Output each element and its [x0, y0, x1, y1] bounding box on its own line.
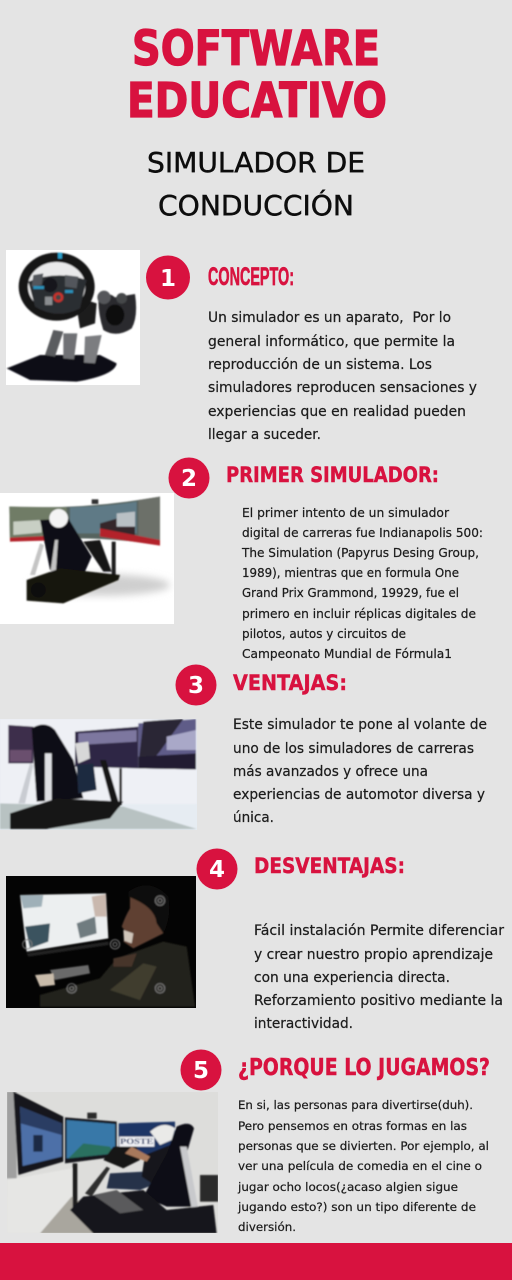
text: por que lo jugamos: Pero pensemos en otras formas en las — [238, 1119, 467, 1133]
title: SOFTWARE — [132, 21, 380, 77]
text: ventajas: Este simulador te pone al volante de — [233, 717, 487, 733]
photo: driver in a triple-screen simulator — [7, 1092, 218, 1233]
photo: steering wheel, shifter and pedals — [6, 250, 140, 385]
subtitle: SIMULADOR DE — [147, 146, 365, 179]
text: primer simulador: pilotos, autos y circuitos de — [242, 627, 406, 641]
text: por que lo jugamos: ver una película de comedia en el cine o — [238, 1159, 482, 1173]
number badge 1: 1 — [160, 266, 176, 292]
number badge 3: 3 — [188, 673, 204, 699]
number badge 2: 2 — [181, 466, 197, 492]
text: ventajas: experiencias de automotor diversa y — [233, 787, 485, 803]
panel: desventajas — [6, 848, 504, 1032]
text: concepto: general informático, que permite la — [208, 334, 455, 350]
number badge 2 — [168, 458, 210, 498]
text: concepto: llegar a suceder. — [208, 427, 321, 443]
text: primer simulador: 1989), mientras que en formula One — [242, 566, 459, 580]
heading: ventajas: VENTAJAS: — [233, 671, 347, 696]
text: ventajas: más avanzados y ofrece una — [233, 764, 428, 780]
text: primer simulador: The Simulation (Papyrus Desing Group, — [241, 546, 479, 560]
panel: primer simulador — [0, 458, 483, 661]
text: ventajas: única. — [233, 810, 274, 826]
text: por que lo jugamos: jugar ocho locos(¿acaso algien sigue — [237, 1180, 458, 1194]
text: por que lo jugamos: jugando esto?) son un tipo diferente de — [237, 1200, 476, 1214]
heading: concepto: CONCEPTO: — [208, 263, 294, 291]
number badge 5: 5 — [193, 1058, 209, 1084]
text: desventajas: con una experiencia directa. — [254, 970, 450, 986]
number badge 4: 4 — [209, 857, 225, 883]
number badge 4 — [196, 848, 238, 890]
text: concepto: Un simulador es un aparato, Por lo — [208, 310, 451, 326]
text: concepto — [208, 310, 477, 443]
title: EDUCATIVO — [127, 73, 387, 129]
text: concepto: experiencias que en realidad pueden — [208, 404, 466, 420]
text: concepto: simuladores reproducen sensaciones y — [208, 380, 477, 396]
panel: concepto — [6, 250, 477, 443]
text: primer simulador — [241, 506, 483, 661]
text: ventajas — [233, 717, 487, 826]
text: por que lo jugamos: personas que se divierten. Por ejemplo, al — [238, 1139, 489, 1153]
text: por que lo jugamos — [237, 1098, 489, 1234]
text: por que lo jugamos: diversión. — [238, 1220, 296, 1234]
panel: por que lo jugamos — [7, 1050, 490, 1234]
text: primer simulador: El primer intento de un simulador — [242, 506, 449, 520]
subtitle: CONDUCCIÓN — [158, 188, 354, 222]
photo: man playing at a monitor in the dark — [6, 876, 196, 1008]
text: primer simulador: Grand Prix Grammond, 19929, fue el — [242, 586, 459, 600]
subtitle — [147, 146, 365, 222]
footer band — [0, 1243, 512, 1280]
number badge 5 — [180, 1050, 222, 1090]
text: desventajas: interactividad. — [254, 1016, 353, 1032]
text: primer simulador: digital de carreras fue Indianapolis 500: — [242, 526, 483, 540]
text: desventajas — [254, 923, 504, 1032]
number badge 3 — [176, 664, 216, 706]
text: concepto: reproducción de un sistema. Los — [208, 357, 432, 373]
title — [127, 21, 387, 129]
text: ventajas: uno de los simuladores de carreras — [233, 741, 474, 757]
text: por que lo jugamos: En si, las personas para divertirse(duh). — [238, 1098, 473, 1112]
number badge 1 — [146, 256, 190, 300]
heading: desventajas: DESVENTAJAS: — [254, 854, 405, 879]
text: desventajas: y crear nuestro propio aprendizaje — [254, 947, 493, 963]
heading: primer simulador: PRIMER SIMULADOR: — [226, 463, 439, 488]
panel: ventajas — [0, 664, 487, 830]
photo: simulator rig in a white room — [0, 719, 197, 830]
text: desventajas: Fácil instalación Permite diferenciar — [254, 923, 504, 939]
text: desventajas: Reforzamiento positivo mediante la — [254, 993, 503, 1009]
photo: driver in a triple-screen simulator: POSTE — [120, 1136, 154, 1146]
text: primer simulador: primero en incluir réplicas digitales de — [242, 607, 476, 621]
photo: racing simulator with curved screens — [0, 493, 174, 624]
text: primer simulador: Campeonato Mundial de Fórmula1 — [242, 647, 452, 661]
